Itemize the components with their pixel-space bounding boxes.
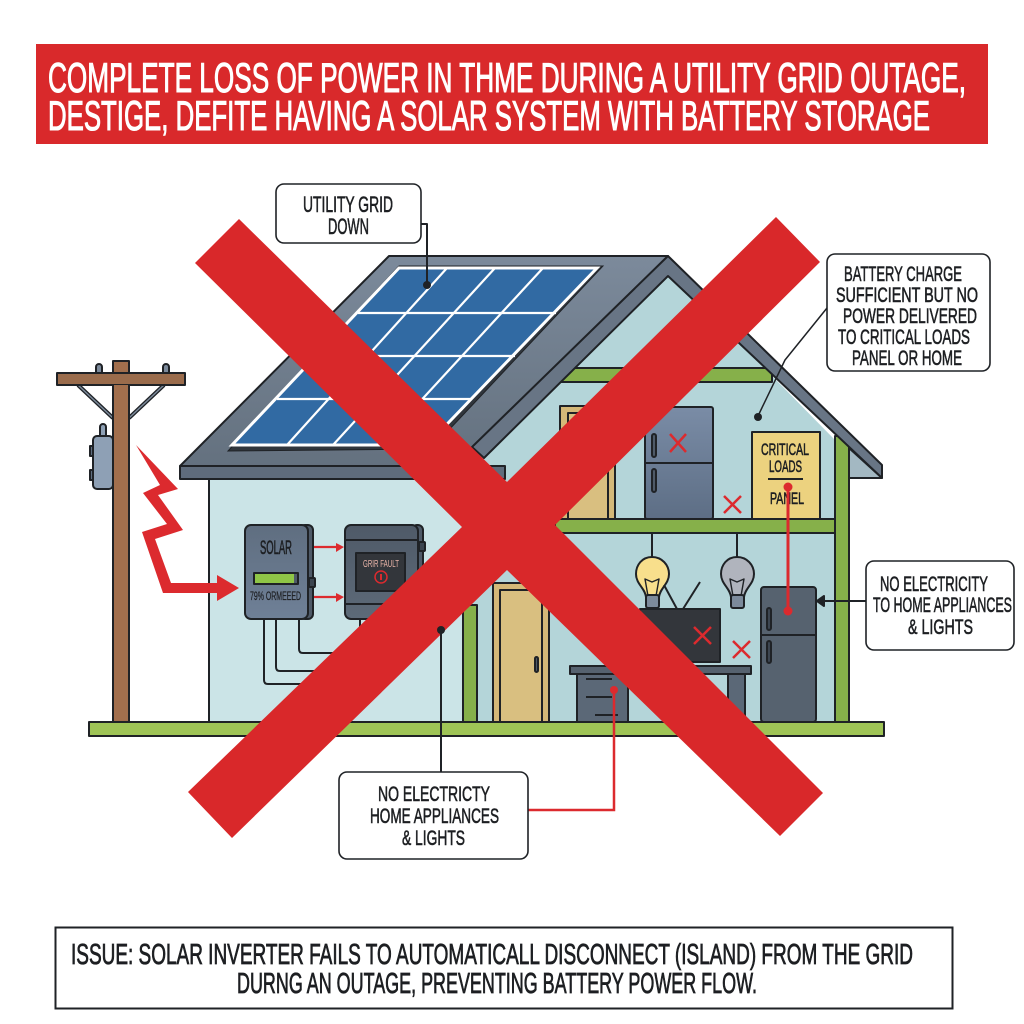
solar inverter: 79% ORMEEED — [250, 589, 301, 603]
transformer box — [90, 424, 113, 489]
battery inverter — [345, 525, 425, 619]
callout: utility grid down: UTILITY GRID — [303, 192, 393, 217]
callout: battery charge sufficient: PANEL OR HOME — [852, 347, 962, 370]
callout: no electricity to home appliances: & LIGHTS — [908, 616, 973, 639]
wires — [264, 619, 360, 684]
leader lines and dots — [421, 224, 866, 810]
callout: utility grid down: DOWN — [328, 214, 369, 239]
upper fridge — [645, 407, 713, 519]
middle floor — [555, 519, 835, 533]
main roof — [180, 256, 668, 466]
battery inverter: GRIR FAULT — [363, 559, 399, 570]
callout: no electricity home appliances — [339, 772, 528, 859]
solar inverter: SOLAR — [260, 538, 292, 559]
callout: battery charge sufficient — [827, 254, 990, 371]
critical loads panel: LOADS — [769, 457, 802, 476]
lightning arrow — [136, 445, 239, 601]
lit bulb — [636, 533, 669, 608]
critical loads panel: CRITICAL — [761, 440, 809, 459]
television — [640, 582, 720, 662]
callout: no electricity home appliances: & LIGHTS — [402, 827, 465, 850]
callout: utility grid down — [276, 184, 421, 243]
title banner — [36, 44, 988, 144]
callout: no electricity to home appliances — [866, 561, 1014, 650]
desk with drawers — [570, 666, 751, 722]
ground strip — [89, 722, 884, 736]
green post — [463, 605, 477, 722]
eave soffit — [849, 448, 882, 478]
callout: no electricity home appliances: HOME APPLIANCES — [370, 805, 499, 828]
solar inverter — [245, 525, 315, 619]
right green post — [835, 436, 849, 722]
callout: no electricity home appliances: NO ELECTRICTY — [378, 783, 490, 806]
critical loads panel — [752, 432, 820, 519]
utility pole — [57, 361, 185, 722]
gable roof strip — [472, 256, 882, 478]
upper beam — [555, 368, 772, 382]
lower fridge — [761, 587, 816, 722]
large red x — [188, 217, 823, 838]
critical loads panel: PANEL — [770, 489, 804, 508]
left wall — [209, 478, 469, 722]
issue statement box — [56, 928, 952, 1008]
roof fascia — [180, 466, 505, 479]
red flow arrows — [314, 547, 337, 597]
upper door — [560, 406, 615, 519]
right interior wall — [462, 270, 835, 722]
red x marks — [670, 434, 750, 658]
house — [89, 256, 884, 736]
solar panel — [228, 266, 603, 451]
lower door — [493, 583, 549, 722]
unlit bulb — [721, 533, 754, 608]
